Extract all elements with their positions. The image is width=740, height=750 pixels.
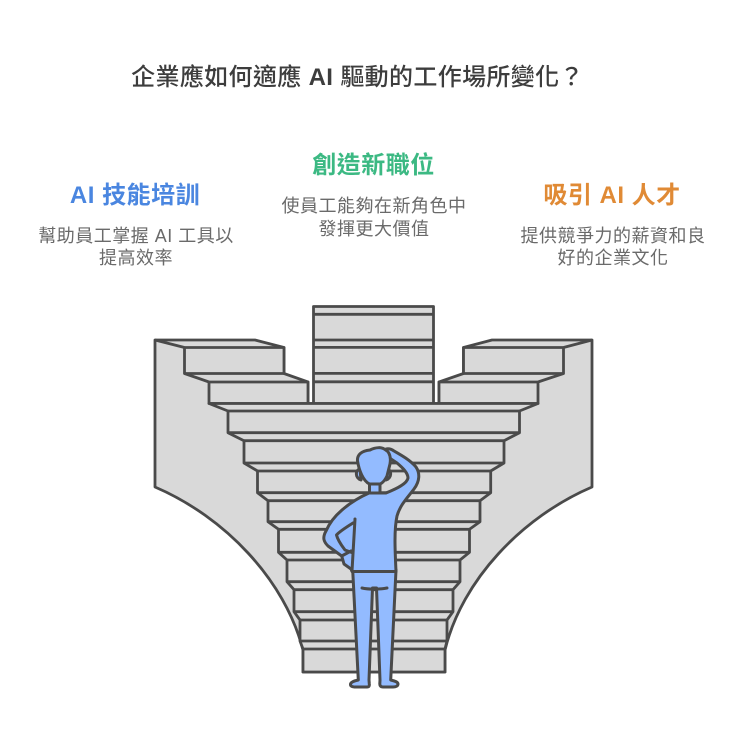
text: AI skills description: 提高效率 (99, 248, 173, 268)
panel: create new roles (282, 151, 466, 239)
ears (356, 469, 391, 480)
text: AI skills description: 幫助員工掌握 AI 工具以 (38, 226, 234, 246)
panel: AI skills training (38, 182, 234, 268)
person scratching head (324, 448, 419, 687)
arm inner lines (336, 519, 355, 571)
left upper steps (155, 340, 308, 404)
text: new roles description: 使員工能夠在新角色中 (282, 196, 466, 216)
text: AI talent description: 提供競爭力的薪資和良 (520, 226, 706, 246)
staircase (155, 306, 592, 672)
right upper steps (439, 340, 592, 404)
head (357, 448, 390, 484)
heading: attract AI talent: 吸引 AI 人才 (543, 182, 681, 209)
central steps (209, 404, 538, 672)
text: new roles description (282, 196, 466, 239)
text: new roles description: 發揮更大價值 (318, 219, 430, 239)
text: AI skills description (38, 226, 234, 268)
title: 企業應如何適應 AI 驅動的工作場所變化？ (131, 63, 584, 91)
heading: AI skills training: AI 技能培訓 (70, 182, 200, 209)
text: AI talent description: 好的企業文化 (558, 248, 668, 268)
neck (370, 482, 380, 493)
torso and arms (324, 449, 419, 572)
panel: attract AI talent (520, 182, 706, 268)
center tower (314, 306, 434, 404)
outer body of stairs (155, 340, 592, 672)
legs (350, 570, 398, 687)
heading: create new roles: 創造新職位 (312, 151, 435, 179)
text: AI talent description (520, 226, 706, 268)
